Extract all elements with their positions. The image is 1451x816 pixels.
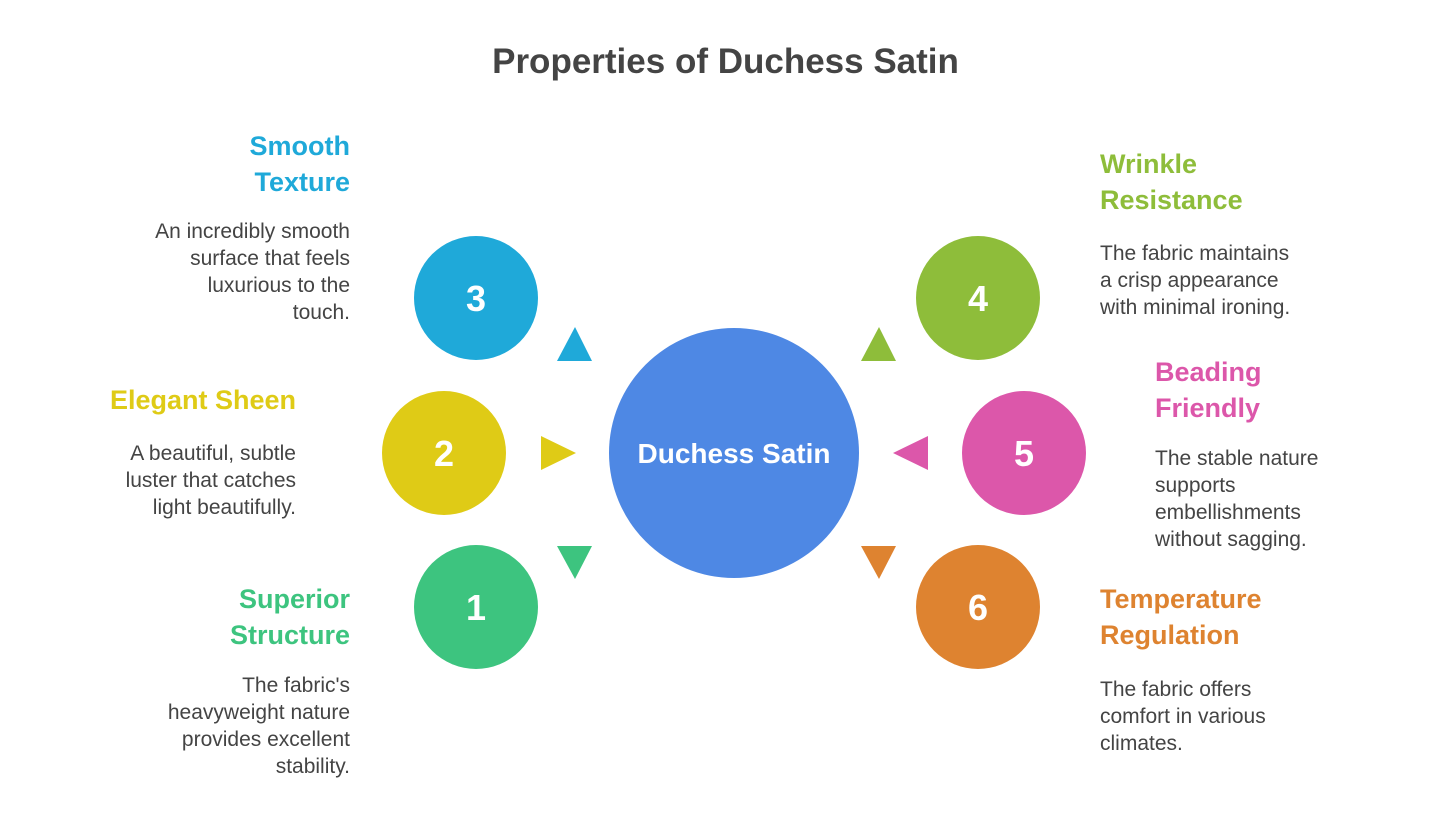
text 6 (1100, 678, 1266, 755)
heading 5: Friendly (1155, 393, 1260, 423)
text 5: embellishments (1155, 501, 1301, 524)
text 5 (1155, 447, 1318, 551)
text 3: touch. (293, 301, 350, 324)
text 4: a crisp appearance (1100, 269, 1279, 292)
circle 5: 5 (1014, 433, 1034, 474)
circle 3 (414, 236, 538, 360)
text 2: light beautifully. (153, 496, 296, 519)
heading 1: Superior (239, 584, 350, 614)
text 4 (1100, 242, 1290, 319)
circle 4 (916, 236, 1040, 360)
heading 4: Wrinkle (1100, 149, 1197, 179)
heading 6: Temperature (1100, 584, 1262, 614)
heading 2: Elegant Sheen (110, 385, 296, 415)
heading 1: Structure (230, 620, 350, 650)
heading 3: Smooth (250, 131, 350, 161)
circle 2: 2 (434, 433, 454, 474)
heading 3 (250, 131, 350, 197)
arrow 1 (557, 546, 592, 579)
text 5: without sagging. (1155, 528, 1307, 551)
text 3 (155, 220, 350, 324)
text 6: The fabric offers (1100, 678, 1251, 701)
center circle (609, 328, 859, 578)
heading 6 (1100, 584, 1262, 650)
text 3: luxurious to the (208, 274, 350, 297)
text 3: surface that feels (190, 247, 350, 270)
text 1: provides excellent (182, 728, 350, 751)
heading 4: Resistance (1100, 185, 1243, 215)
heading 6: Regulation (1100, 620, 1240, 650)
text 4: with minimal ironing. (1100, 296, 1290, 319)
arrow 4 (861, 327, 896, 361)
arrow 2 (541, 436, 576, 470)
circle 3: 3 (466, 278, 486, 319)
text 5: The stable nature (1155, 447, 1318, 470)
heading 3: Texture (254, 167, 350, 197)
heading 1 (230, 584, 350, 650)
text 5: supports (1155, 474, 1236, 497)
text 6: comfort in various (1100, 705, 1266, 728)
title: Properties of Duchess Satin (492, 42, 959, 81)
arrow 6 (861, 546, 896, 579)
text 2 (126, 442, 296, 519)
text 2: luster that catches (126, 469, 296, 492)
circle 6 (916, 545, 1040, 669)
text 2: A beautiful, subtle (130, 442, 296, 465)
heading 5 (1155, 357, 1262, 423)
text 4: The fabric maintains (1100, 242, 1289, 265)
circle 1: 1 (466, 587, 486, 628)
text 1: The fabric's (242, 674, 350, 697)
text 3: An incredibly smooth (155, 220, 350, 243)
arrow 3 (557, 327, 592, 361)
circle 5 (962, 391, 1086, 515)
text 6: climates. (1100, 732, 1183, 755)
text 1 (168, 674, 350, 778)
circle 1 (414, 545, 538, 669)
text 1: stability. (276, 755, 350, 778)
center circle: Duchess Satin (638, 438, 830, 469)
heading 4 (1100, 149, 1243, 215)
heading 5: Beading (1155, 357, 1262, 387)
circle 2 (382, 391, 506, 515)
circle 4: 4 (968, 278, 988, 319)
arrow 5 (893, 436, 928, 470)
text 1: heavyweight nature (168, 701, 350, 724)
circle 6: 6 (968, 587, 988, 628)
